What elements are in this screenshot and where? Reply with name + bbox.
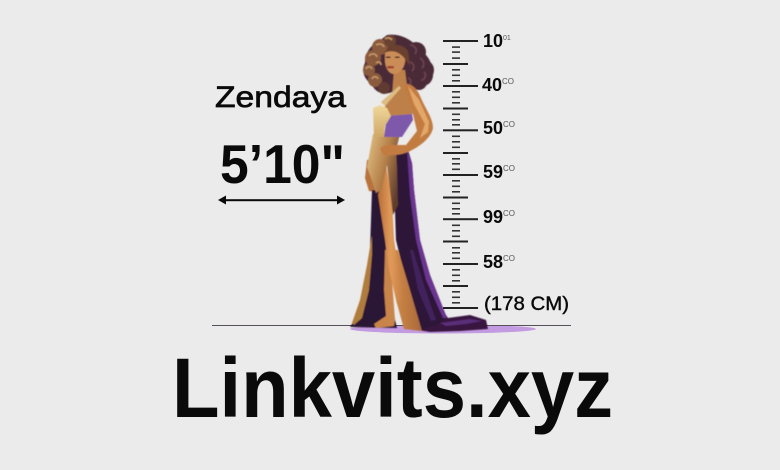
arm and hand on hip <box>380 84 433 155</box>
lips and eyes <box>386 56 400 68</box>
skirt left dark panel <box>350 190 397 328</box>
chest and neck <box>384 70 413 116</box>
label 178 CM: (178 CM) <box>484 294 569 315</box>
hair left curls <box>363 35 396 94</box>
label 50: CO <box>503 120 515 129</box>
far leg and shoe <box>374 250 395 328</box>
near leg <box>378 165 403 300</box>
fringe <box>384 45 410 66</box>
figure: woman in gown <box>350 35 488 332</box>
label 59: CO <box>503 164 515 173</box>
label 99: 99 <box>483 207 503 227</box>
skirt right dark panel <box>393 150 447 330</box>
label 40: 40 <box>482 75 502 95</box>
height value: 5’10" <box>220 133 345 195</box>
mid ticks <box>443 63 468 287</box>
hair highlights <box>366 38 392 79</box>
label 10: 10 <box>483 31 503 51</box>
face <box>385 47 405 74</box>
left hand <box>365 158 377 192</box>
floor line <box>212 325 571 326</box>
label 40: CO <box>502 77 514 86</box>
major ticks <box>443 40 478 309</box>
label 99: CO <box>503 209 515 218</box>
skirt left gold edge <box>352 235 372 325</box>
name heading: Zendaya <box>215 81 346 114</box>
label 10: 01 <box>503 35 511 42</box>
arm highlight <box>408 86 429 138</box>
strap <box>381 86 401 106</box>
ruler labels <box>482 31 569 315</box>
purple inner fold <box>410 250 436 321</box>
floor shadow <box>350 324 536 334</box>
arrow: width indicator <box>218 196 345 204</box>
bodice gold <box>373 105 391 137</box>
train <box>418 300 488 332</box>
label 58: 58 <box>483 252 503 272</box>
purple sheen <box>407 150 447 318</box>
orange lower panel <box>394 250 422 331</box>
bodice purple <box>384 114 413 137</box>
label 58: CO <box>503 254 515 263</box>
hair back <box>363 35 434 94</box>
hip gold wrap <box>367 134 400 215</box>
footer brand text: Linkvits.xyz <box>172 341 613 435</box>
hair right curls <box>408 45 425 85</box>
label 50: 50 <box>483 118 503 138</box>
height ruler <box>443 40 478 309</box>
minor ticks <box>452 46 460 304</box>
label 59: 59 <box>483 162 503 182</box>
